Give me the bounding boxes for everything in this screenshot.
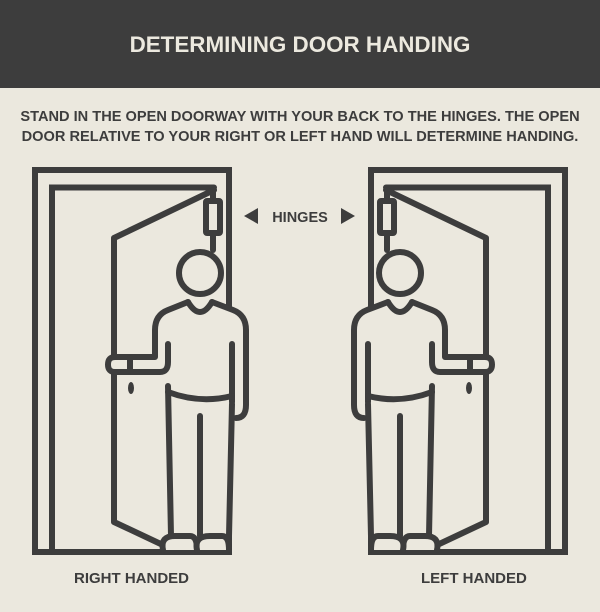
label: right handed: RIGHT HANDED xyxy=(74,570,189,587)
instruction text: STAND IN THE OPEN DOORWAY WITH YOUR BACK TO THE HINGES. THE OPEN xyxy=(20,109,580,125)
instruction text xyxy=(20,109,580,145)
title xyxy=(0,0,600,88)
door: left handed xyxy=(354,170,565,552)
instruction text: DOOR RELATIVE TO YOUR RIGHT OR LEFT HAND WILL DETERMINE HANDING. xyxy=(22,129,578,145)
label: left handed: LEFT HANDED xyxy=(421,570,527,587)
door: right handed xyxy=(35,170,246,552)
hinges callout xyxy=(244,208,355,226)
hinges callout: HINGES xyxy=(272,210,328,226)
title: DETERMINING DOOR HANDING xyxy=(130,32,470,57)
